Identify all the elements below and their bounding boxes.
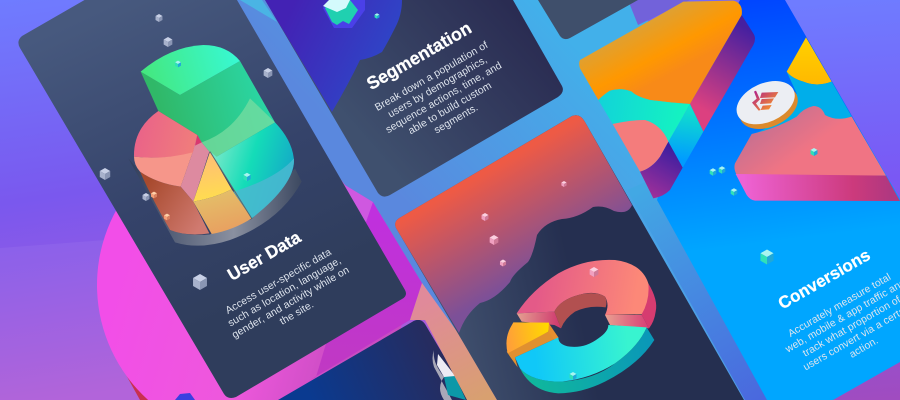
wave shapes [734,37,900,201]
text block: segmentation description: able to build custom [407,80,494,137]
icon: logo coin [730,73,805,137]
text block: user data description: gender, and activity while on [230,265,352,341]
text block: user data description [218,244,358,352]
pie chart [128,45,302,246]
icon: rings [432,350,466,400]
cube [375,13,379,19]
card: bottom dark [278,283,497,400]
text block: user data description: the site. [278,299,316,328]
strip: salmon [410,283,497,400]
donut chart [506,260,656,393]
floating cubes [710,148,817,264]
floating cubes [100,14,272,220]
card: conversions [579,0,900,400]
text block: user data description: Access user-specific data [224,247,334,317]
text block: segmentation description: segments. [432,102,480,136]
card: user data [18,0,406,398]
text block: segmentation description: users by demographics, [386,55,489,120]
blue backing bands [237,0,790,400]
card fragment: top [538,0,638,39]
text block: conversions description [777,267,900,388]
text block: conversions description: Accurately measure total [786,272,893,340]
icon: cube beside title [193,274,207,290]
heading: Segmentation: Segmentation [363,18,475,94]
floating cubes [482,181,598,380]
card: segmentation [265,0,563,197]
text block: segmentation description [372,39,516,157]
orange 3D tile [579,1,755,198]
text block: segmentation description: Break down a population of [373,40,490,114]
heading: Conversions: Conversions [775,245,874,313]
text block: conversions description: action. [848,336,880,361]
card: donut chart [395,115,744,400]
magenta circle backdrop [97,130,422,400]
heading: User Data: User Data [224,227,304,285]
text block: conversions description: track what proportion of [801,294,900,359]
icon: hexagon block [323,0,365,28]
text block: user data description: such as location, language, [226,255,343,329]
text block: segmentation description: sequence actions, time, and [384,60,504,136]
